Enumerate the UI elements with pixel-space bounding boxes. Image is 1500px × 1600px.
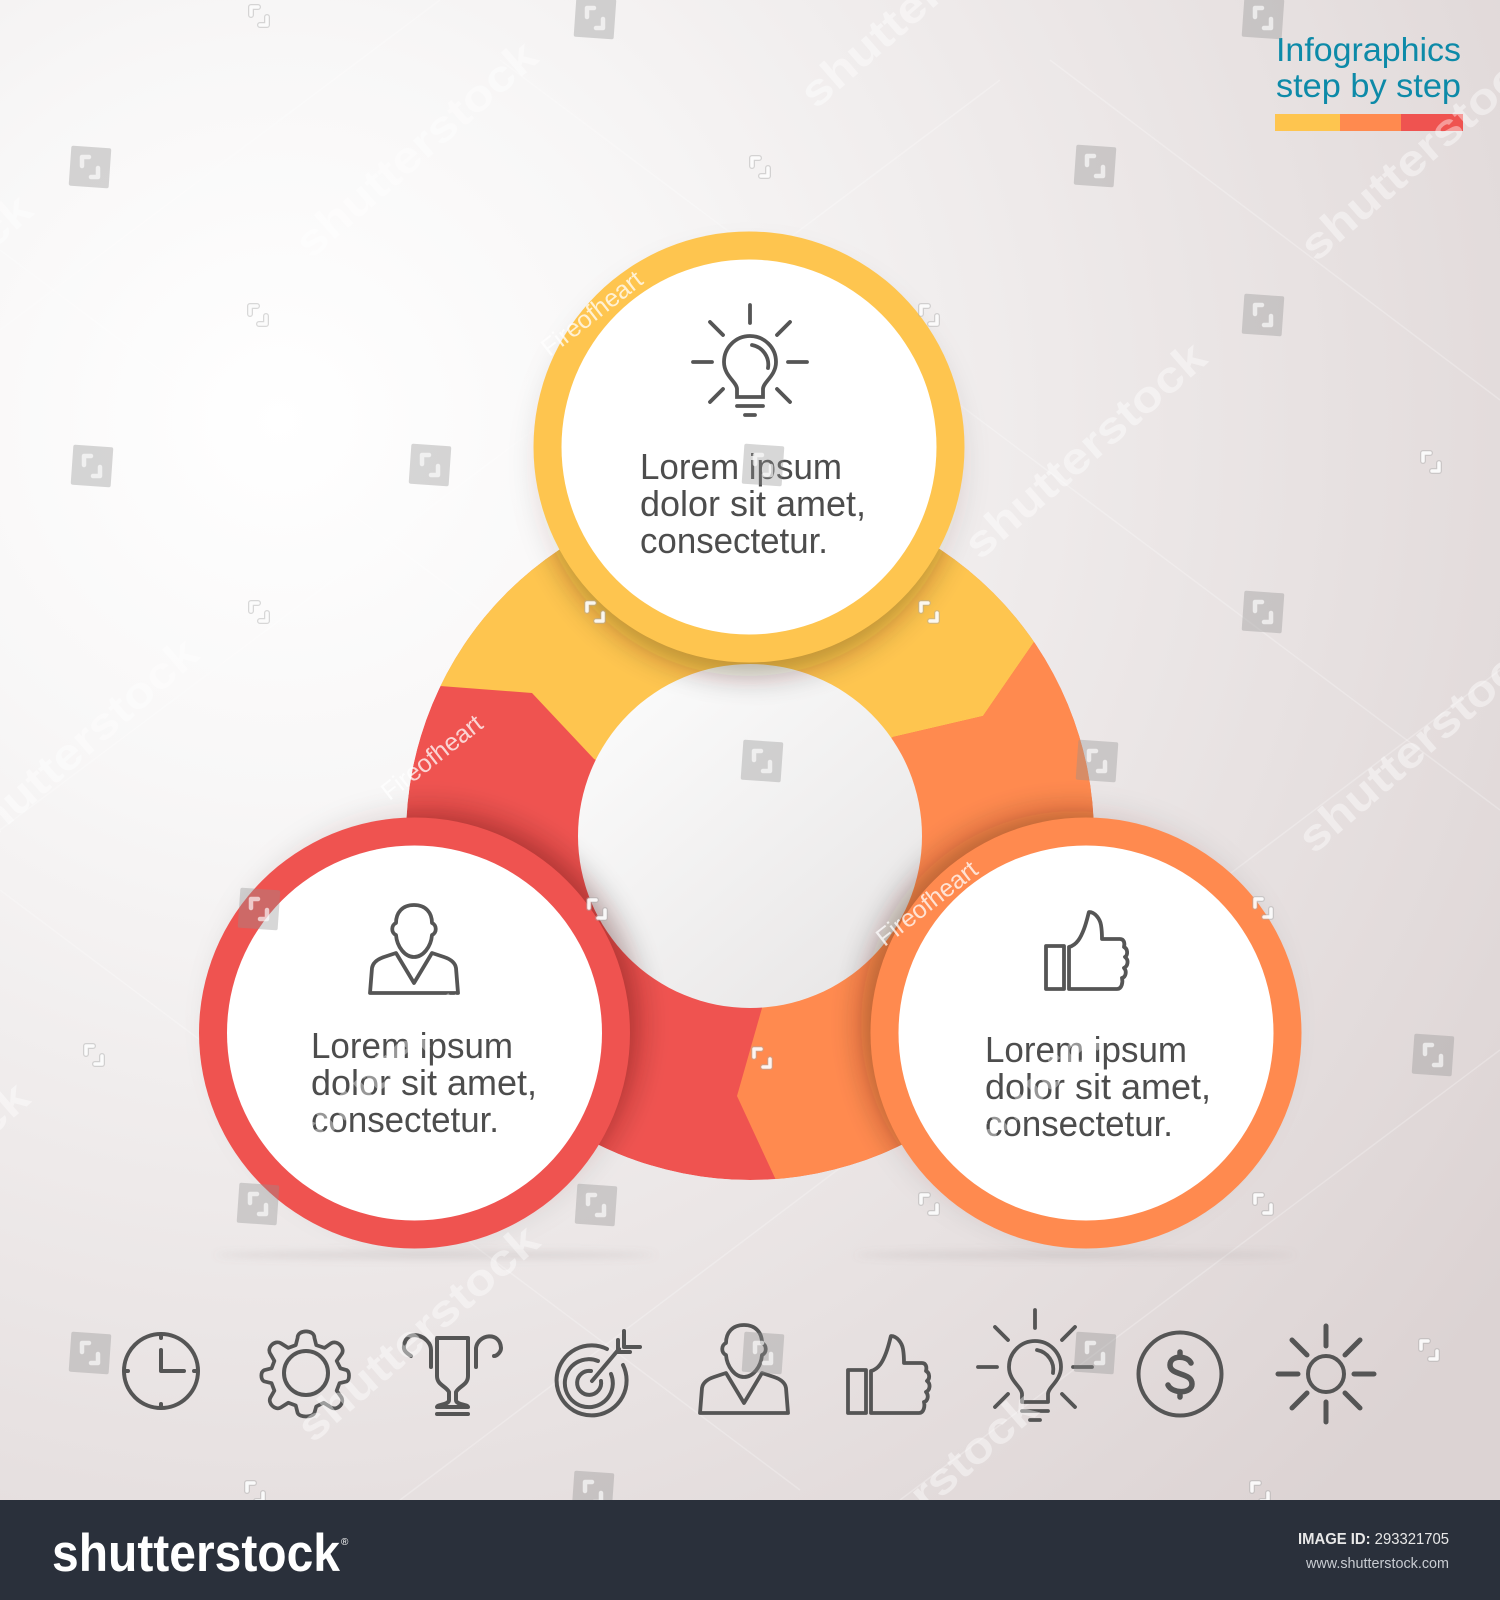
watermark: shutterstock text: shutterstock <box>954 924 1216 1161</box>
watermark: author name: Fireofheart <box>536 265 648 362</box>
segment: yellow <box>440 548 1034 760</box>
icon: person <box>700 1325 788 1413</box>
text: top step: consectetur. <box>640 520 828 561</box>
footer registered mark: ® <box>341 1537 349 1548</box>
icon: target <box>557 1331 640 1415</box>
footer image id: IMAGE ID: 293321705 <box>1298 1531 1449 1548</box>
footer logo: shutterstock <box>52 1524 340 1583</box>
icon: trophy <box>404 1335 501 1414</box>
panel: top step (yellow) <box>534 232 964 662</box>
text: left step: consectetur. <box>311 1099 499 1140</box>
title: Infographics <box>1276 31 1461 68</box>
icon: thumbs up <box>848 1336 930 1413</box>
text: right step: dolor sit amet, <box>985 1066 1211 1107</box>
text: left step: dolor sit amet, <box>311 1062 537 1103</box>
icon: clock <box>124 1334 198 1408</box>
panel: left step (red) <box>199 818 630 1248</box>
ring chart: three arrow segments <box>406 548 1094 1180</box>
icon: light bulb <box>978 1310 1092 1420</box>
icon: gear <box>261 1331 349 1416</box>
text: right step: Lorem ipsum <box>985 1029 1187 1070</box>
text: left step: Lorem ipsum <box>311 1025 513 1066</box>
watermark: author name: Fireofheart <box>871 855 983 952</box>
ground shadow: right circle <box>855 1251 1295 1259</box>
text: top step: Lorem ipsum <box>640 446 842 487</box>
watermark: shutterstock text: shutterstock <box>954 332 1216 569</box>
ground shadow: left circle <box>215 1251 655 1259</box>
watermark: shutterstock text: shutterstock <box>287 1215 549 1452</box>
watermark: shutterstock text: shutterstock <box>285 31 547 268</box>
footer bar <box>0 1500 1500 1600</box>
shadow: top circle <box>536 250 962 676</box>
center circle <box>578 664 922 1008</box>
text: right step: consectetur. <box>985 1103 1173 1144</box>
icon: sun <box>1278 1326 1374 1422</box>
segment: orange <box>737 642 1094 1179</box>
icon: dollar coin <box>1138 1332 1222 1416</box>
watermark: shutterstock text: shutterstock <box>282 924 544 1161</box>
panel: right step (orange) <box>870 818 1302 1248</box>
watermark: author name <box>376 265 983 952</box>
watermark: author name: Fireofheart <box>376 709 488 806</box>
icon row <box>124 1310 1374 1422</box>
legend bar <box>1275 114 1463 131</box>
text: top step: dolor sit amet, <box>640 483 866 524</box>
icon: person <box>370 905 458 993</box>
footer url: www.shutterstock.com <box>1305 1556 1449 1572</box>
ring shadows: stronger on the ring and hub <box>213 250 1287 1237</box>
title: step by step <box>1276 67 1461 104</box>
segment: red <box>406 492 1094 1180</box>
shadow: right circle <box>861 811 1287 1237</box>
icon: thumbs up <box>1046 912 1128 989</box>
icon: light bulb <box>693 305 807 415</box>
shadow: left circle <box>213 811 639 1237</box>
